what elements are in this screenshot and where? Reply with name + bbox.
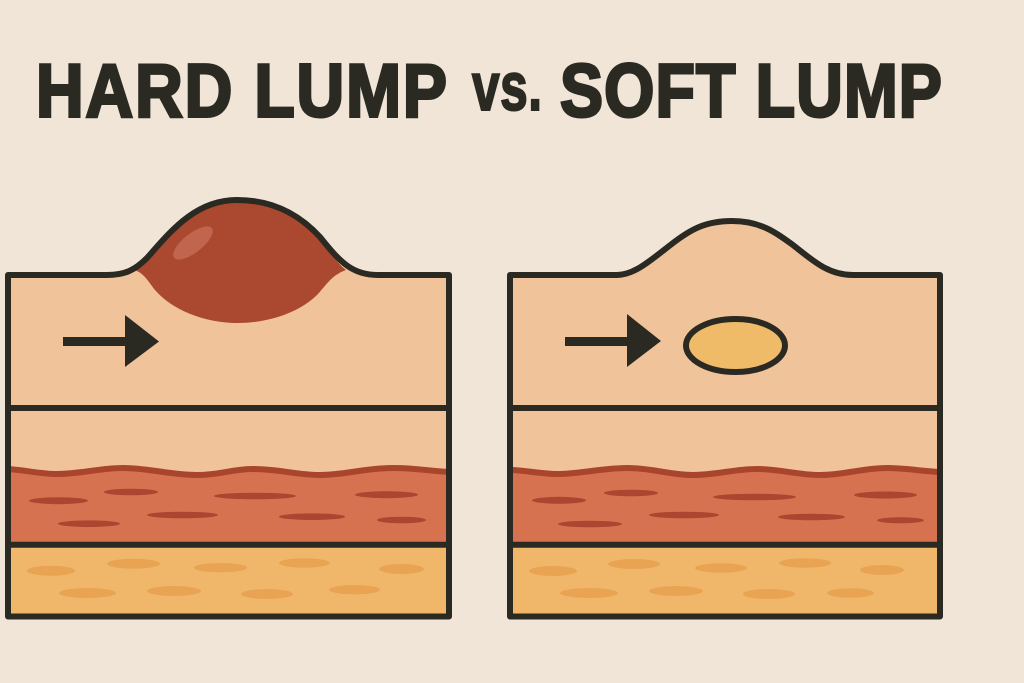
fat layer (510, 545, 940, 616)
title: vs. (472, 48, 542, 125)
panel: hard lump (8, 200, 449, 616)
skin layer with bump (510, 221, 940, 408)
panel outline (8, 200, 449, 616)
title: SOFT LUMP (560, 49, 942, 133)
skin layer with bump (8, 200, 449, 408)
panel outline (510, 221, 940, 616)
arrow (63, 315, 159, 367)
panel: soft lump (510, 221, 940, 616)
soft lump mass (686, 319, 785, 372)
title (36, 48, 942, 133)
muscle layer (8, 468, 449, 544)
lump highlight (168, 221, 218, 265)
dermis layer (8, 408, 449, 478)
muscle layer (510, 468, 940, 544)
fat layer (8, 545, 449, 616)
title: HARD LUMP (36, 49, 447, 132)
arrow (565, 314, 661, 367)
muscle fibres (29, 489, 426, 527)
muscle top line (8, 468, 449, 475)
fat globules (529, 558, 904, 599)
dermis layer (510, 408, 940, 478)
muscle top line (510, 468, 940, 475)
muscle fibres (532, 490, 924, 527)
hard lump mass (134, 200, 346, 323)
fat globules (27, 558, 424, 599)
